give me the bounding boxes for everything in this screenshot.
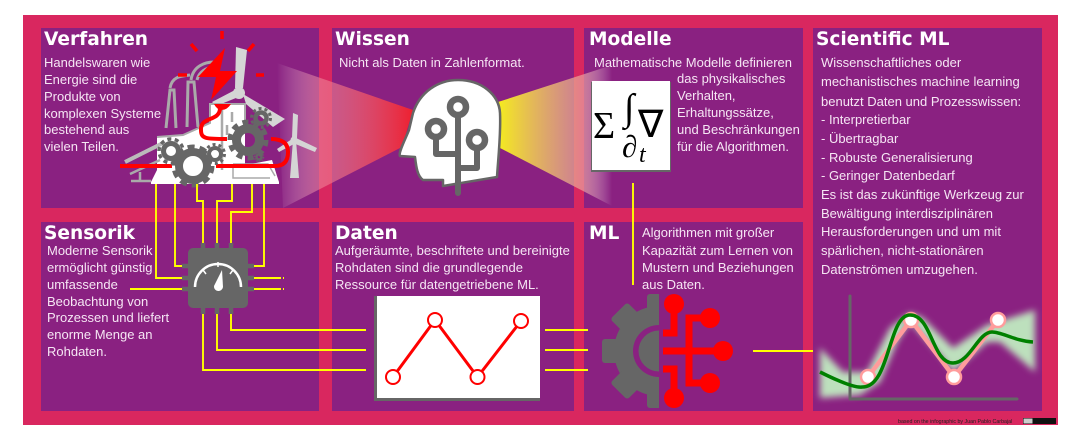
panel: Verfahren bbox=[41, 28, 319, 208]
panel: Scientific ML bbox=[813, 28, 1042, 411]
icon: factory with turbines bbox=[120, 31, 317, 185]
text: Verfahren body: vielen Teilen. bbox=[44, 139, 119, 154]
text: Verfahren body: Produkte von bbox=[44, 89, 121, 104]
chart: scientific ML prediction bbox=[820, 296, 1035, 399]
icon: sensor chip with gauge bbox=[182, 243, 254, 314]
text: Sensorik body: Beobachtung von bbox=[47, 294, 148, 309]
beam: process to head bbox=[277, 63, 413, 208]
text: Modelle body: Mathematische Modelle definieren bbox=[594, 55, 792, 70]
credit line: based on the infographic by Juan Pablo Carbajal bbox=[898, 419, 1012, 425]
heading: Verfahren: Verfahren bbox=[44, 29, 148, 50]
red pipes bbox=[120, 108, 288, 166]
formula card: ∇ bbox=[637, 104, 664, 146]
lightning bolt bbox=[198, 48, 237, 100]
small turbine bbox=[277, 113, 317, 178]
gears bbox=[159, 108, 270, 185]
text: Scientific ML body: Wissenschaftliches oder bbox=[821, 55, 962, 70]
heading: Modelle: Modelle bbox=[589, 29, 672, 50]
text: ML body: Kapazität zum Lernen von bbox=[642, 243, 793, 258]
panel: ML bbox=[584, 222, 803, 411]
text: Scientific ML body: spärlichen, nicht-stationären bbox=[821, 243, 984, 258]
heading: Wissen: Wissen bbox=[335, 29, 410, 50]
text: Scientific ML body: - Robuste Generalisierung bbox=[821, 150, 973, 165]
text: Scientific ML body: mechanistisches machine learning bbox=[821, 74, 1020, 89]
text: Modelle body: Erhaltungssätze, bbox=[677, 105, 774, 120]
text: Modelle body: für die Algorithmen. bbox=[677, 139, 789, 154]
text: Verfahren body: Energie sind die bbox=[44, 72, 137, 87]
rays bbox=[178, 31, 264, 75]
formula card: ∫ bbox=[622, 87, 637, 131]
text: Sensorik body: Moderne Sensorik bbox=[47, 243, 153, 258]
large turbine bbox=[212, 47, 285, 127]
text: Verfahren body: bestehend aus bbox=[44, 122, 130, 137]
text: Scientific ML body: - Übertragbar bbox=[821, 131, 899, 146]
text: Sensorik body: Prozessen und liefert bbox=[47, 310, 170, 325]
formula card: ∂ bbox=[622, 129, 637, 164]
formula card: t bbox=[639, 142, 647, 168]
text: Modelle body: Verhalten, bbox=[677, 88, 736, 103]
icon: half gear with neural net bbox=[602, 294, 733, 408]
text: Modelle body: das physikalisches bbox=[677, 71, 786, 86]
text: Scientific ML body: Es ist das zukünftige Werkzeug zur bbox=[821, 187, 1024, 202]
factory buildings bbox=[125, 104, 279, 184]
text: Daten body: Ressource für datengetriebene ML. bbox=[335, 277, 539, 292]
formula card: Σ bbox=[593, 105, 615, 147]
panel: Modelle bbox=[584, 28, 803, 208]
chimneys and smoke bbox=[166, 62, 216, 128]
line chart card bbox=[374, 296, 540, 401]
heading: Sensorik: Sensorik bbox=[44, 223, 136, 244]
panel: Sensorik bbox=[41, 222, 319, 411]
icon: head with circuit bbox=[400, 80, 500, 193]
panel: Wissen bbox=[332, 28, 574, 208]
text: Verfahren body: komplexen Systeme bbox=[44, 106, 161, 121]
heading: Daten: Daten bbox=[335, 223, 398, 244]
text: Modelle body: und Beschränkungen bbox=[677, 122, 800, 137]
heading: Scientific ML: Scientific ML bbox=[816, 29, 950, 50]
text: Scientific ML body: Datenströmen umzugehen. bbox=[821, 262, 978, 277]
text: ML body: Algorithmen mit großer bbox=[642, 225, 775, 240]
formula card bbox=[591, 81, 671, 172]
text: Scientific ML body: Herausforderungen und um mit bbox=[821, 224, 1001, 239]
panel: Daten bbox=[332, 222, 574, 411]
text: ML body: Mustern und Beziehungen bbox=[642, 260, 794, 275]
text: Scientific ML body: - Geringer Datenbedarf bbox=[821, 168, 955, 183]
text: ML body: aus Daten. bbox=[642, 277, 705, 292]
text: Sensorik body: ermöglicht günstig bbox=[47, 260, 152, 275]
text: Verfahren body: Handelswaren wie bbox=[44, 55, 150, 70]
text: Scientific ML body: - Interpretierbar bbox=[821, 112, 911, 127]
text: Sensorik body: enorme Menge an bbox=[47, 327, 153, 342]
text: Daten body: Aufgeräumte, beschriftete und bereinigte bbox=[335, 243, 570, 258]
heading: ML: ML bbox=[589, 223, 620, 244]
yellow signal lines bbox=[130, 183, 813, 370]
license badge bbox=[1023, 418, 1056, 424]
text: Scientific ML body: Bewältigung interdisziplinären bbox=[821, 206, 993, 221]
text: Scientific ML body: benutzt Daten und Prozesswissen: bbox=[821, 94, 1021, 109]
text: Sensorik body: umfassende bbox=[47, 277, 118, 292]
text: Sensorik body: Rohdaten. bbox=[47, 344, 107, 359]
text: Daten body: Rohdaten sind die grundlegende bbox=[335, 260, 523, 275]
beam: head to model bbox=[498, 66, 612, 206]
text: Wissen body: Nicht als Daten in Zahlenformat. bbox=[339, 55, 525, 70]
